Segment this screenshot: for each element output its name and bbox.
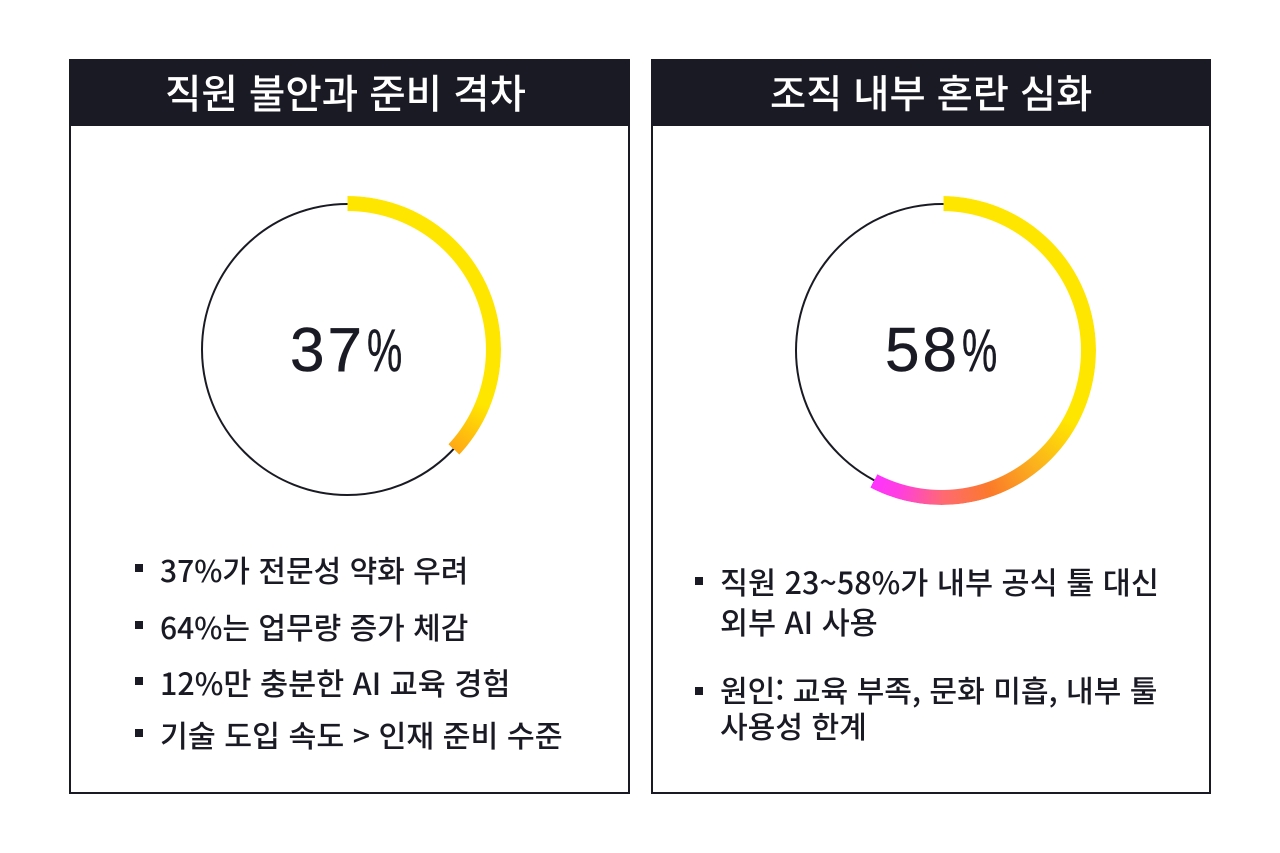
- donut arc: 58%: [870, 196, 1096, 505]
- value: 37%: %: [367, 317, 402, 384]
- panel: organizational confusion: [651, 59, 1211, 794]
- panel: employee anxiety: [69, 59, 630, 794]
- heading: employee anxiety: [69, 59, 630, 126]
- bullet 2: [695, 667, 1157, 747]
- donut arc: 37%: [348, 196, 501, 454]
- bullet 2: 사용성 한계: [720, 703, 867, 747]
- bullet list: employee anxiety: [135, 547, 563, 756]
- value: 37%: 37: [290, 316, 365, 385]
- bullet 2: 원인: 교육 부족, 문화 미흡, 내부 툴: [720, 667, 1157, 711]
- bullet list: organizational confusion: [695, 559, 1159, 747]
- value: 58%: [885, 316, 997, 385]
- value: 58%: %: [962, 317, 997, 384]
- bullet 1: 37%가 전문성 약화 우려: [160, 547, 468, 591]
- heading: organizational confusion: [651, 59, 1211, 126]
- bullet 3: 12%만 충분한 AI 교육 경험: [160, 660, 510, 704]
- bullet 1: 외부 AI 사용: [720, 599, 878, 643]
- donut track: 37%: [201, 202, 494, 496]
- bullet 4: 기술 도입 속도 > 인재 준비 수준: [160, 712, 563, 756]
- heading: employee anxiety: 직원 불안과 준비 격차: [165, 63, 526, 120]
- bullet 2: 64%는 업무량 증가 체감: [160, 604, 468, 648]
- bullet 1: 직원 23~58%가 내부 공식 툴 대신: [720, 559, 1159, 603]
- value: 58%: 58: [885, 316, 960, 385]
- heading: organizational confusion: 조직 내부 혼란 심화: [770, 63, 1092, 120]
- value: 37%: [290, 316, 402, 385]
- bullet 1: [695, 559, 1159, 643]
- donut track: 58%: [795, 202, 1089, 498]
